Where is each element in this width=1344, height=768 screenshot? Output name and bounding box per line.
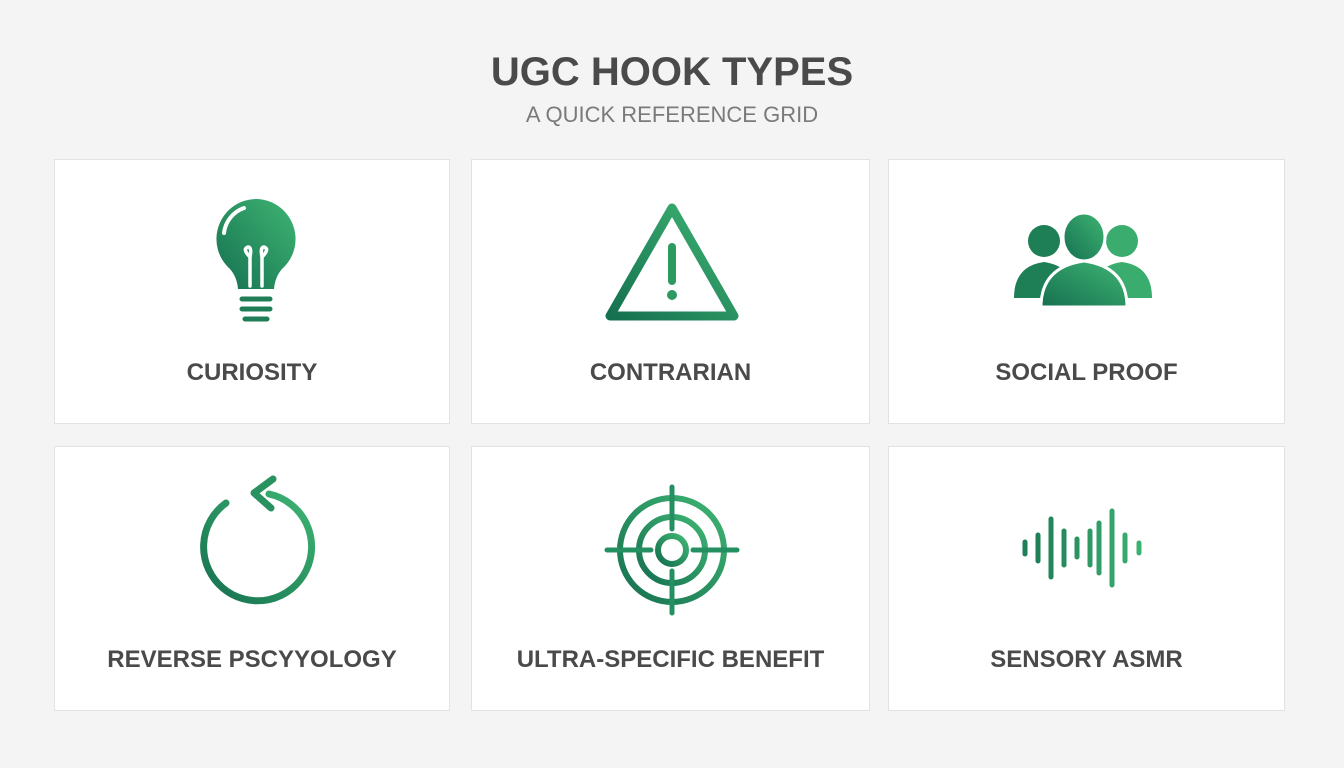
panel: social proof [888, 159, 1285, 424]
label: ULTRA-SPECIFIC BENEFIT [517, 646, 824, 673]
panel: contrarian [471, 159, 870, 424]
title: UGC HOOK TYPES [491, 50, 853, 94]
icon: warning triangle [606, 204, 738, 320]
icon: light bulb [216, 199, 296, 322]
icon: circular arrow [200, 476, 316, 604]
label: CURIOSITY [187, 359, 317, 386]
panel: curiosity [54, 159, 450, 424]
subtitle: A QUICK REFERENCE GRID [526, 102, 818, 127]
label: SENSORY ASMR [990, 646, 1183, 673]
panel: reverse psychology [54, 446, 450, 711]
label: REVERSE PSCYYOLOGY [107, 646, 397, 673]
icon: sound wave [1022, 508, 1142, 588]
label: CONTRARIAN [590, 359, 751, 386]
label: SOCIAL PROOF [995, 359, 1178, 386]
panel: sensory asmr [888, 446, 1285, 711]
icon: people [1014, 214, 1152, 306]
icon: target [604, 484, 740, 616]
panel: ultra-specific benefit [471, 446, 870, 711]
